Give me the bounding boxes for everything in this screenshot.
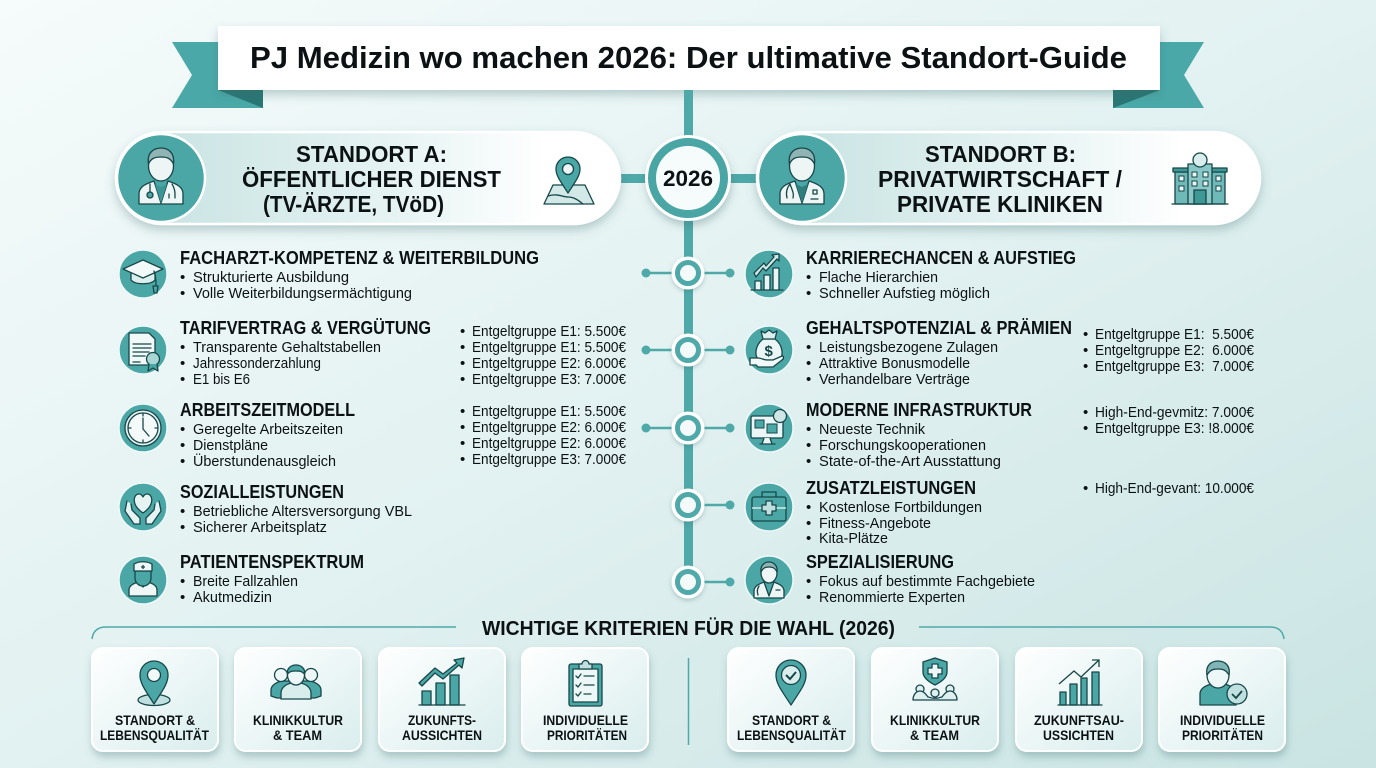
icon: doctor B: [758, 134, 846, 222]
text: Tarifvertrag: Jahressonderzahlung: [193, 355, 321, 372]
heading: Standort B: PRIVATWIRTSCHAFT /: [878, 166, 1123, 192]
card: Prioritäten A: PRIORITÄTEN: [547, 727, 627, 743]
text: Spezialisierung: •: [806, 589, 811, 606]
text: Tarifvertrag: E1 bis E6: [193, 371, 250, 388]
text: Moderne Infrastruktur: •: [806, 437, 811, 454]
card: Klinikkultur A: & TEAM: [273, 727, 322, 743]
salary list A2: Entgeltgruppe E1: 5.500€: [472, 403, 627, 420]
icon: specialist doctor: [745, 556, 793, 604]
text: Spezialisierung: SPEZIALISIERUNG: [806, 552, 954, 572]
text: Facharzt-Kompetenz: •: [180, 285, 185, 302]
salary list B1: Entgeltgruppe E2: 6.000€: [1095, 342, 1255, 359]
text: Karrierechancen: Schneller Aufstieg möglich: [819, 285, 990, 302]
icon: medical case: [745, 483, 793, 531]
central timeline: [618, 90, 759, 585]
icon: clock: [119, 404, 167, 452]
card: Prioritäten A: INDIVIDUELLE: [543, 712, 628, 728]
text: Patientenspektrum: PATIENTENSPEKTRUM: [180, 552, 364, 572]
card: Standort A: STANDORT &: [115, 712, 195, 728]
salary list A2: •: [460, 403, 465, 420]
text: Zusatzleistungen: Kita-Plätze: [819, 530, 888, 547]
icon: money bag: [745, 326, 793, 374]
card: Zukunft A: [379, 648, 505, 751]
heading: criteria: [92, 617, 1284, 640]
text: Karrierechancen: KARRIERECHANCEN & AUFSTIEG: [806, 248, 1076, 268]
salary list A1: [460, 323, 627, 388]
card: Prioritäten B: INDIVIDUELLE: [1180, 712, 1265, 728]
text: Gehaltspotenzial: Verhandelbare Verträge: [819, 371, 970, 388]
card: Standort B: LEBENSQUALITÄT: [737, 727, 846, 743]
salary list B1: [1083, 326, 1255, 375]
text: Tarifvertrag: [180, 318, 431, 388]
text: Zusatzleistungen: Fitness-Angebote: [819, 515, 931, 532]
text: Karrierechancen: Flache Hierarchien: [819, 269, 938, 286]
text: Arbeitszeitmodell: ARBEITSZEITMODELL: [180, 400, 355, 420]
text: Arbeitszeitmodell: [180, 400, 355, 470]
text: Tarifvertrag: Transparente Gehaltstabellen: [193, 339, 381, 356]
card: Zukunft B: USSICHTEN: [1043, 727, 1114, 743]
text: Moderne Infrastruktur: Neueste Technik: [819, 421, 925, 438]
text: Arbeitszeitmodell: Überstundenausgleich: [193, 452, 336, 470]
text: Arbeitszeitmodell: •: [180, 453, 185, 470]
salary list A1: •: [460, 323, 465, 340]
heading: Standort B: STANDORT B:: [925, 141, 1076, 167]
card: Standort A: LEBENSQUALITÄT: [100, 727, 209, 743]
text: Gehaltspotenzial: GEHALTSPOTENZIAL & PRÄMIEN: [806, 318, 1072, 338]
text: Arbeitszeitmodell: Dienstpläne: [193, 437, 268, 454]
text: Facharzt-Kompetenz: [180, 248, 539, 302]
salary list B1: •: [1083, 358, 1088, 375]
text: Facharzt-Kompetenz: Volle Weiterbildungsermächtigung: [193, 285, 412, 302]
text: Gehaltspotenzial: Attraktive Bonusmodelle: [819, 355, 970, 372]
text: Zusatzleistungen: ZUSATZLEISTUNGEN: [806, 478, 976, 498]
timeline node 3: [642, 412, 734, 444]
salary list A1: Entgeltgruppe E3: 7.000€: [472, 371, 627, 388]
heading: Standort B: [878, 141, 1123, 217]
salary list A1: Entgeltgruppe E2: 6.000€: [472, 355, 627, 372]
panel: Standort B header: [757, 132, 1260, 224]
salary list B2: Entgeltgruppe E3: !8.000€: [1095, 420, 1255, 437]
salary list A1: •: [460, 371, 465, 388]
title: PJ Medizin wo machen 2026: Der ultimative Standort-Guide: [250, 40, 1127, 75]
card: Standort B: [728, 648, 854, 751]
icon: contract document: [119, 326, 167, 374]
icon: nurse: [119, 556, 167, 604]
salary list B2: [1083, 404, 1255, 437]
salary list A1: •: [460, 355, 465, 372]
icon: career chart: [745, 250, 793, 298]
salary list A1: Entgeltgruppe E1: 5.500€: [472, 339, 627, 356]
salary list B3: •: [1083, 480, 1088, 497]
heading: Standort A: ÖFFENTLICHER DIENST: [242, 166, 501, 192]
salary list A2: •: [460, 419, 465, 436]
text: Gehaltspotenzial: •: [806, 371, 811, 388]
year badge 2026: 2026: [663, 166, 713, 191]
icon: map pin: [544, 157, 594, 204]
text: Zusatzleistungen: •: [806, 499, 811, 516]
text: Moderne Infrastruktur: •: [806, 453, 811, 470]
card: Prioritäten A: [522, 648, 648, 751]
text: Moderne Infrastruktur: •: [806, 421, 811, 438]
salary list B2: High-End-gevmitz: 7.000€: [1095, 404, 1255, 421]
icon: monitor: [745, 404, 793, 452]
text: Tarifvertrag: •: [180, 339, 185, 356]
text: Patientenspektrum: [180, 552, 364, 606]
text: Tarifvertrag: •: [180, 371, 185, 388]
text: Karrierechancen: •: [806, 269, 811, 286]
icon: hospital: [1172, 153, 1228, 204]
card: Klinikkultur B: [872, 648, 998, 751]
text: Facharzt-Kompetenz: FACHARZT-KOMPETENZ & WEITERBILDUNG: [180, 248, 539, 268]
icon: heart in hands: [119, 483, 167, 531]
heading: Standort B: PRIVATE KLINIKEN: [897, 191, 1103, 217]
salary list A2: [460, 403, 627, 468]
text: Moderne Infrastruktur: MODERNE INFRASTRUKTUR: [806, 400, 1032, 420]
text: Gehaltspotenzial: [806, 318, 1072, 388]
title: [218, 26, 1160, 90]
card: Prioritäten B: [1159, 648, 1285, 751]
timeline node 2: [642, 334, 734, 366]
left ribbon: [172, 42, 263, 108]
year badge 2026: [645, 135, 731, 221]
panel: Standort A header: [116, 132, 620, 224]
text: Zusatzleistungen: •: [806, 515, 811, 532]
text: Sozialleistungen: SOZIALLEISTUNGEN: [180, 482, 344, 502]
salary list A2: •: [460, 435, 465, 452]
icon: graduation cap: [119, 250, 167, 298]
heading: Standort A: (TV-ÄRZTE, TVöD): [263, 191, 444, 217]
salary list A2: Entgeltgruppe E2: 6.000€: [472, 435, 627, 452]
heading: Standort A: STANDORT A:: [296, 141, 447, 167]
card: Zukunft B: [1016, 648, 1142, 751]
text: Arbeitszeitmodell: •: [180, 437, 185, 454]
salary list A1: •: [460, 339, 465, 356]
card: Zukunft A: ZUKUNFTS-: [408, 712, 476, 728]
salary list A1: Entgeltgruppe E1: 5.500€: [472, 323, 627, 340]
card: Zukunft A: AUSSICHTEN: [402, 727, 482, 743]
text: Moderne Infrastruktur: State-of-the-Art Ausstattung: [819, 453, 1001, 470]
text: Spezialisierung: [806, 552, 1035, 606]
heading: Standort A: [242, 141, 501, 217]
text: Patientenspektrum: •: [180, 573, 185, 590]
text: Karrierechancen: [806, 248, 1076, 302]
salary list B2: •: [1083, 420, 1088, 437]
text: Gehaltspotenzial: Leistungsbezogene Zulagen: [819, 339, 998, 356]
salary list A2: Entgeltgruppe E2: 6.000€: [472, 419, 627, 436]
timeline node 1: [642, 256, 734, 290]
salary list B1: Entgeltgruppe E1: 5.500€: [1095, 326, 1255, 343]
salary list B1: •: [1083, 326, 1088, 343]
text: Sozialleistungen: •: [180, 519, 185, 536]
text: Gehaltspotenzial: •: [806, 355, 811, 372]
card: Klinikkultur A: [235, 648, 361, 751]
card: Standort B: STANDORT &: [752, 712, 831, 728]
text: Facharzt-Kompetenz: •: [180, 269, 185, 286]
text: Sozialleistungen: Betriebliche Altersversorgung VBL: [193, 503, 412, 520]
text: Arbeitszeitmodell: •: [180, 421, 185, 438]
text: Arbeitszeitmodell: Geregelte Arbeitszeiten: [193, 421, 343, 438]
icon: doctor A: [117, 134, 205, 222]
card: Standort A: [92, 648, 218, 751]
salary list B2: •: [1083, 404, 1088, 421]
text: Zusatzleistungen: Kostenlose Fortbildungen: [819, 499, 982, 516]
card: Klinikkultur B: KLINIKKULTUR: [890, 712, 980, 728]
text: Patientenspektrum: •: [180, 589, 185, 606]
card: Prioritäten B: PRIORITÄTEN: [1182, 727, 1263, 743]
text: Tarifvertrag: TARIFVERTRAG & VERGÜTUNG: [180, 318, 431, 338]
card: Zukunft B: ZUKUNFTSAU-: [1034, 712, 1124, 728]
text: Sozialleistungen: [180, 482, 412, 536]
icon: money bag: $: [764, 343, 774, 360]
text: Sozialleistungen: •: [180, 503, 185, 520]
card: Klinikkultur B: & TEAM: [910, 727, 959, 743]
text: Spezialisierung: •: [806, 573, 811, 590]
salary list B1: •: [1083, 342, 1088, 359]
timeline node 4: [672, 488, 734, 522]
text: Gehaltspotenzial: •: [806, 339, 811, 356]
card: Klinikkultur A: KLINIKKULTUR: [253, 712, 343, 728]
salary list B1: Entgeltgruppe E3: 7.000€: [1095, 358, 1255, 375]
text: Zusatzleistungen: [806, 478, 982, 547]
heading: criteria: WICHTIGE KRITERIEN FÜR DIE WAHL (2026): [482, 617, 895, 640]
right ribbon: [1113, 42, 1204, 108]
text: Sozialleistungen: Sicherer Arbeitsplatz: [193, 519, 327, 536]
text: Spezialisierung: Renommierte Experten: [819, 589, 965, 606]
text: Spezialisierung: Fokus auf bestimmte Fachgebiete: [819, 573, 1035, 590]
text: Zusatzleistungen: •: [806, 530, 811, 547]
text: Patientenspektrum: Akutmedizin: [193, 589, 272, 606]
salary list B3: High-End-gevant: 10.000€: [1095, 480, 1255, 497]
salary list A2: Entgeltgruppe E3: 7.000€: [472, 451, 627, 468]
text: Moderne Infrastruktur: [806, 400, 1032, 470]
text: Patientenspektrum: Breite Fallzahlen: [193, 573, 298, 590]
text: Moderne Infrastruktur: Forschungskooperationen: [819, 437, 986, 454]
text: Karrierechancen: •: [806, 285, 811, 302]
text: Facharzt-Kompetenz: Strukturierte Ausbildung: [193, 269, 349, 286]
timeline node 5: [672, 566, 734, 598]
text: Tarifvertrag: •: [180, 355, 185, 372]
salary list A2: •: [460, 451, 465, 468]
